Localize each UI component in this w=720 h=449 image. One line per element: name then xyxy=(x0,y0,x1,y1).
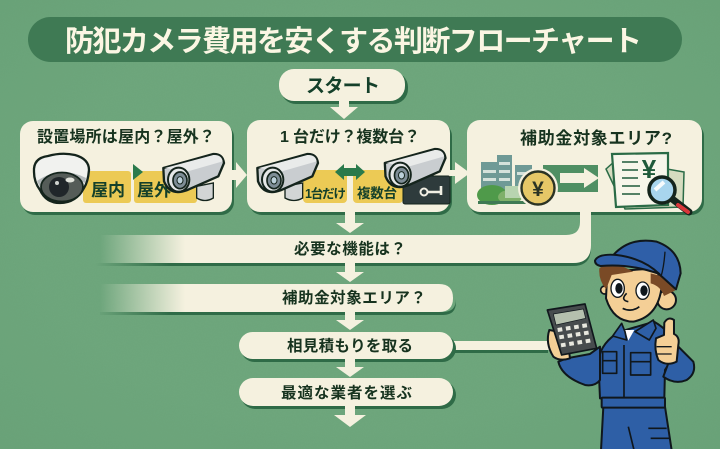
flow bar: subsidy area: 補助金対象エリア？ xyxy=(282,288,426,307)
icon: single camera xyxy=(257,154,318,200)
flow bar: subsidy area xyxy=(90,284,456,315)
arrow: panel 2 down to functions xyxy=(336,212,364,233)
start node xyxy=(279,69,408,104)
thumbs up hand xyxy=(655,318,679,364)
flow bar: required functions xyxy=(90,210,591,266)
belt xyxy=(602,398,665,408)
arrow: final xyxy=(334,406,366,427)
legs xyxy=(601,407,673,449)
arrow: quotes to vendor xyxy=(336,359,364,377)
face xyxy=(606,268,662,322)
label: single: 1台だけ xyxy=(305,186,346,201)
flow bar: get quotes xyxy=(239,332,551,362)
icon: bullet camera xyxy=(163,154,224,200)
flow bar: required functions: 必要な機能は？ xyxy=(294,239,406,258)
arrow: panel 1 to panel 2 xyxy=(232,162,247,188)
icon: yen coin xyxy=(518,168,558,208)
icon: dome camera xyxy=(34,154,89,203)
flow bar: choose vendor xyxy=(239,378,456,409)
label: multiple xyxy=(353,170,403,203)
label: single xyxy=(303,170,347,203)
icon: city buildings xyxy=(477,155,538,205)
calculator xyxy=(547,304,597,355)
arrow: functions to subsidy xyxy=(336,263,364,282)
title xyxy=(28,17,682,62)
icon: magnifier xyxy=(649,177,689,212)
arm left xyxy=(558,347,600,385)
flow bar: choose vendor: 最適な業者を選ぶ xyxy=(281,383,412,402)
panel: subsidy area xyxy=(467,120,704,215)
ears xyxy=(657,291,676,309)
title: 防犯カメラ費用を安くする判断フローチャート xyxy=(65,25,642,58)
panel: number of cameras xyxy=(247,120,452,215)
arm right xyxy=(663,345,694,382)
eyes xyxy=(611,279,624,297)
flow bar: get quotes: 相見積もりを取る xyxy=(287,337,413,355)
icon: green triangle xyxy=(133,164,143,180)
panel: installation location xyxy=(20,121,234,215)
calculator hand xyxy=(548,330,570,360)
label: indoor: 屋内 xyxy=(91,181,125,200)
start node: スタート xyxy=(306,75,380,97)
label: multiple: 複数台 xyxy=(357,185,398,201)
heading: count question: 1 台だけ？複数台？ xyxy=(280,127,420,146)
jacket xyxy=(598,322,678,398)
cap xyxy=(613,241,681,289)
icon: documents xyxy=(606,153,684,209)
icon: green arrow block xyxy=(543,165,599,192)
arrow: subsidy to quotes xyxy=(336,312,364,330)
arrow: start to step 2 xyxy=(330,100,358,119)
label: outdoor xyxy=(134,171,197,203)
arrow: panel 2 to panel 3 xyxy=(450,162,470,184)
icon: double arrow xyxy=(335,164,365,180)
label: outdoor: 屋外 xyxy=(137,181,171,200)
character: worker with calculator xyxy=(547,241,694,449)
hair xyxy=(599,260,675,296)
icon: documents: ¥ xyxy=(642,154,657,184)
icon: yen coin: ¥ xyxy=(532,178,544,201)
heading: location question: 設置場所は屋内？屋外？ xyxy=(37,127,215,146)
icon: second camera xyxy=(385,149,445,187)
label: indoor xyxy=(83,171,131,203)
heading: subsidy question: 補助金対象エリア? xyxy=(520,128,672,148)
icon: multi-camera recorder xyxy=(403,176,450,204)
pockets and collar xyxy=(603,345,651,398)
